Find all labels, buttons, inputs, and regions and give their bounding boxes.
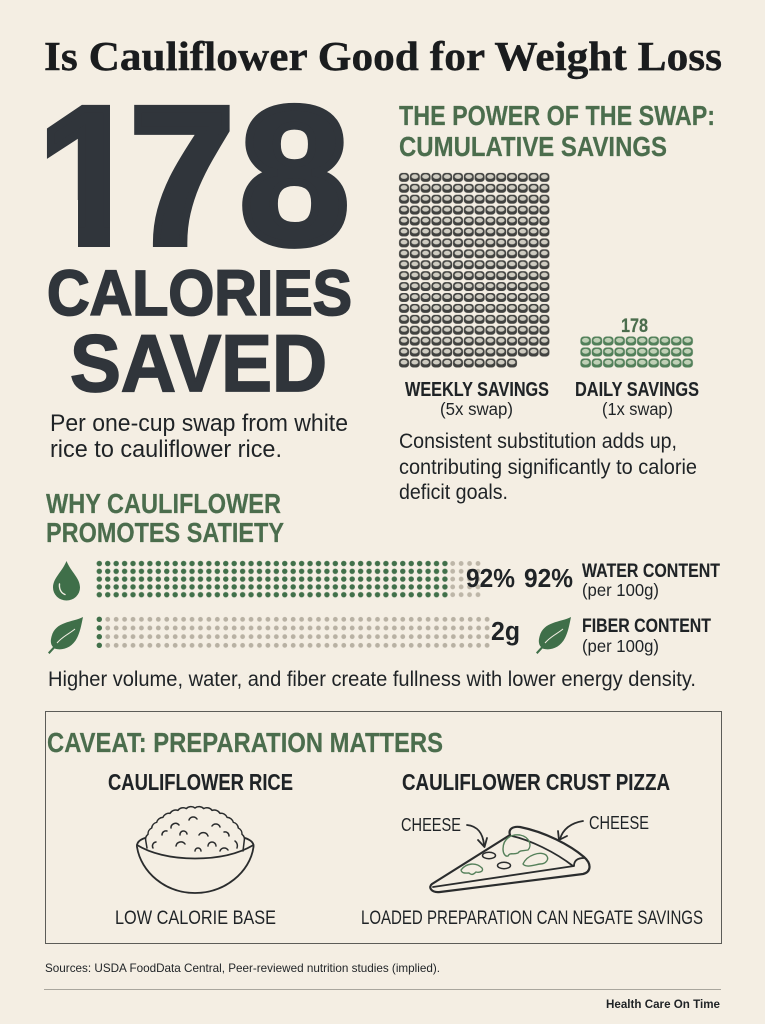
swap description — [399, 429, 697, 504]
label: daily savings: DAILY SAVINGS — [575, 378, 699, 401]
satiety summary: Higher volume, water, and fiber create fullness with lower energy density. — [48, 668, 696, 691]
swap description: deficit goals. — [399, 480, 508, 504]
rice heading: CAULIFLOWER RICE — [108, 769, 293, 795]
label: daily savings — [575, 378, 699, 419]
hero description: rice to cauliflower rice. — [50, 436, 282, 463]
arrow left — [467, 825, 487, 847]
swap description: contributing significantly to calorie — [399, 455, 697, 479]
cheese label left: CHEESE — [401, 815, 461, 835]
hero description — [50, 410, 348, 463]
daily value: 178 — [621, 316, 648, 337]
value: fiber 2g: 2g — [491, 618, 520, 646]
caveat heading: CAVEAT: PREPARATION MATTERS — [47, 727, 443, 758]
label: fiber content — [582, 616, 711, 656]
icon: rice bowl — [137, 807, 254, 893]
label: water content: (per 100g) — [582, 580, 659, 600]
label: weekly savings: WEEKLY SAVINGS — [405, 378, 549, 401]
value: water 92%: 92% — [466, 565, 515, 593]
chart: weekly savings bowls — [399, 172, 550, 368]
heading: satiety — [46, 488, 284, 548]
saved label: SAVED — [70, 319, 327, 409]
heading: power of the swap: THE POWER OF THE SWAP: — [399, 100, 715, 131]
panel: caveat — [46, 712, 722, 944]
heading: power of the swap: CUMULATIVE SAVINGS — [399, 131, 667, 162]
heading: satiety: PROMOTES SATIETY — [46, 517, 284, 548]
credit: Health Care On Time — [606, 997, 720, 1011]
rice caption: LOW CALORIE BASE — [115, 908, 276, 929]
heading: power of the swap — [399, 100, 715, 162]
label: weekly savings — [405, 378, 549, 419]
icon: water drop — [53, 561, 80, 601]
label: water content: WATER CONTENT — [582, 561, 720, 582]
cauliflower rice column — [108, 769, 293, 929]
icon: leaf — [48, 617, 83, 654]
calories label: CALORIES — [47, 257, 352, 329]
dot bar: fiber content — [95, 615, 491, 650]
value: water 92%: 92% — [524, 565, 573, 593]
heading: satiety: WHY CAULIFLOWER — [46, 488, 281, 519]
big number: 1 — [38, 67, 142, 285]
hero description: Per one-cup swap from white — [50, 410, 348, 437]
dot bar: water content — [95, 560, 482, 599]
label: weekly savings: (5x swap) — [440, 399, 513, 419]
hero stat: 178 calories saved — [46, 102, 350, 393]
cheese label right: CHEESE — [589, 813, 649, 833]
title: Is Cauliflower Good for Weight Loss — [44, 33, 722, 79]
value: water 92% — [466, 565, 573, 593]
pizza heading: CAULIFLOWER CRUST PIZZA — [402, 769, 670, 795]
big number: 7 — [130, 67, 234, 285]
big number: 8 — [240, 67, 349, 285]
sources: Sources: USDA FoodData Central, Peer-reviewed nutrition studies (implied). — [45, 961, 440, 975]
label: daily savings: (1x swap) — [602, 399, 673, 419]
label: water content — [582, 561, 720, 600]
big number — [46, 102, 347, 249]
arrow right — [558, 821, 583, 840]
icon: pizza slice — [430, 827, 590, 892]
icon: leaf right — [536, 617, 571, 654]
cauliflower pizza column — [361, 769, 703, 929]
label: fiber content: (per 100g) — [582, 636, 659, 656]
swap description: Consistent substitution adds up, — [399, 429, 677, 453]
label: fiber content: FIBER CONTENT — [582, 616, 711, 637]
chart: daily savings bowls — [580, 316, 693, 368]
